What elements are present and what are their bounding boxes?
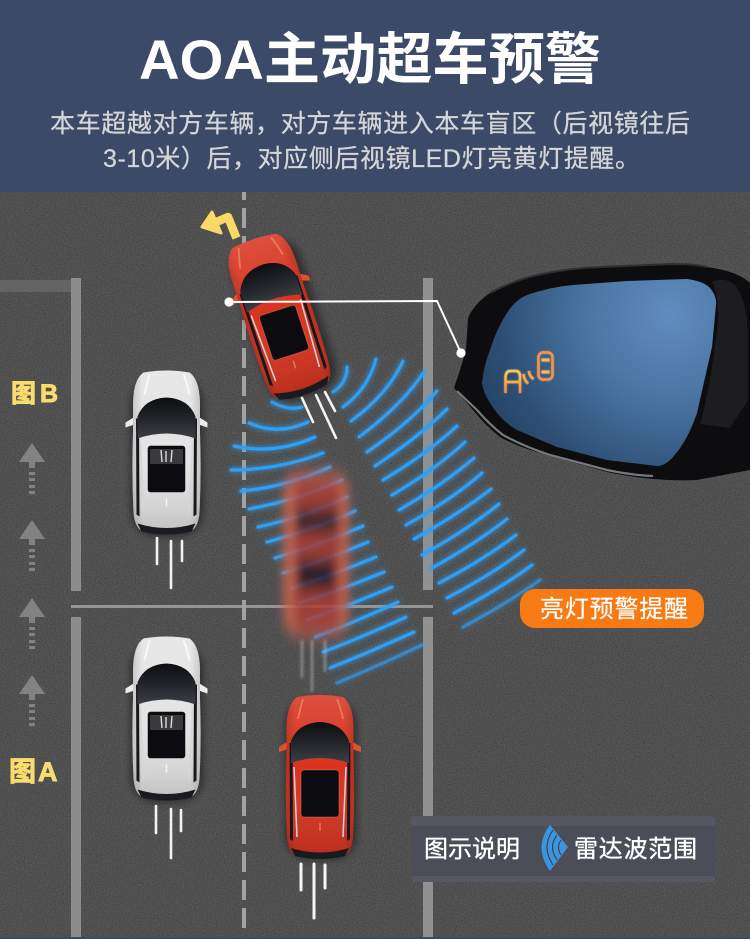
arrow 2 bbox=[19, 520, 45, 571]
arrow 4 bbox=[19, 675, 45, 726]
direction arrows bbox=[19, 443, 45, 726]
icon: radar wave bbox=[542, 825, 568, 871]
housing right shell bbox=[700, 280, 748, 428]
lower rim highlight bbox=[457, 391, 653, 476]
legend title: 图示说明 bbox=[424, 836, 520, 863]
mirror housing bbox=[454, 264, 750, 480]
description text bbox=[50, 110, 690, 173]
red car A bbox=[279, 695, 361, 860]
trails of red car A bbox=[301, 864, 325, 918]
white car A bbox=[126, 636, 208, 802]
arrow 1 bbox=[19, 443, 45, 494]
blurred moving car bbox=[283, 472, 349, 692]
title: AOA主动超车预警 bbox=[139, 28, 601, 91]
red car B, changing lane bbox=[215, 226, 343, 408]
connector line from car to mirror bbox=[224, 297, 466, 358]
trails of white car A bbox=[156, 806, 181, 858]
label: figure B: 图B bbox=[11, 380, 58, 408]
road background bbox=[0, 190, 750, 939]
blind spot warning icon bbox=[506, 352, 552, 393]
description text: 本车超越对方车辆，对方车辆进入本车盲区（后视镜往后 bbox=[50, 110, 690, 138]
description text: 3-10米）后，对应侧后视镜LED灯亮黄灯提醒。 bbox=[103, 145, 640, 173]
header panel bbox=[0, 0, 750, 192]
callout: light warning bbox=[520, 589, 704, 628]
legend bbox=[411, 816, 715, 882]
label: figure A: 图A bbox=[9, 757, 58, 787]
lane markings bbox=[0, 192, 433, 939]
legend text: 雷达波范围 bbox=[574, 836, 697, 863]
white car B bbox=[126, 370, 208, 536]
bottom edge strip bbox=[0, 937, 750, 939]
sunroof reflection bbox=[150, 449, 183, 464]
mirror glass bbox=[482, 279, 716, 466]
radar waves bbox=[231, 359, 540, 683]
trails of white car B bbox=[157, 538, 182, 588]
blurred trails bbox=[302, 640, 325, 692]
side mirror bbox=[454, 264, 750, 480]
sunroof reflection bbox=[150, 715, 183, 730]
callout: light warning: 亮灯预警提醒 bbox=[540, 596, 688, 623]
housing top edge bbox=[490, 264, 707, 293]
arrow 3 bbox=[19, 598, 45, 649]
trails of red car B bbox=[302, 392, 336, 438]
yellow turn arrow bbox=[202, 212, 236, 238]
